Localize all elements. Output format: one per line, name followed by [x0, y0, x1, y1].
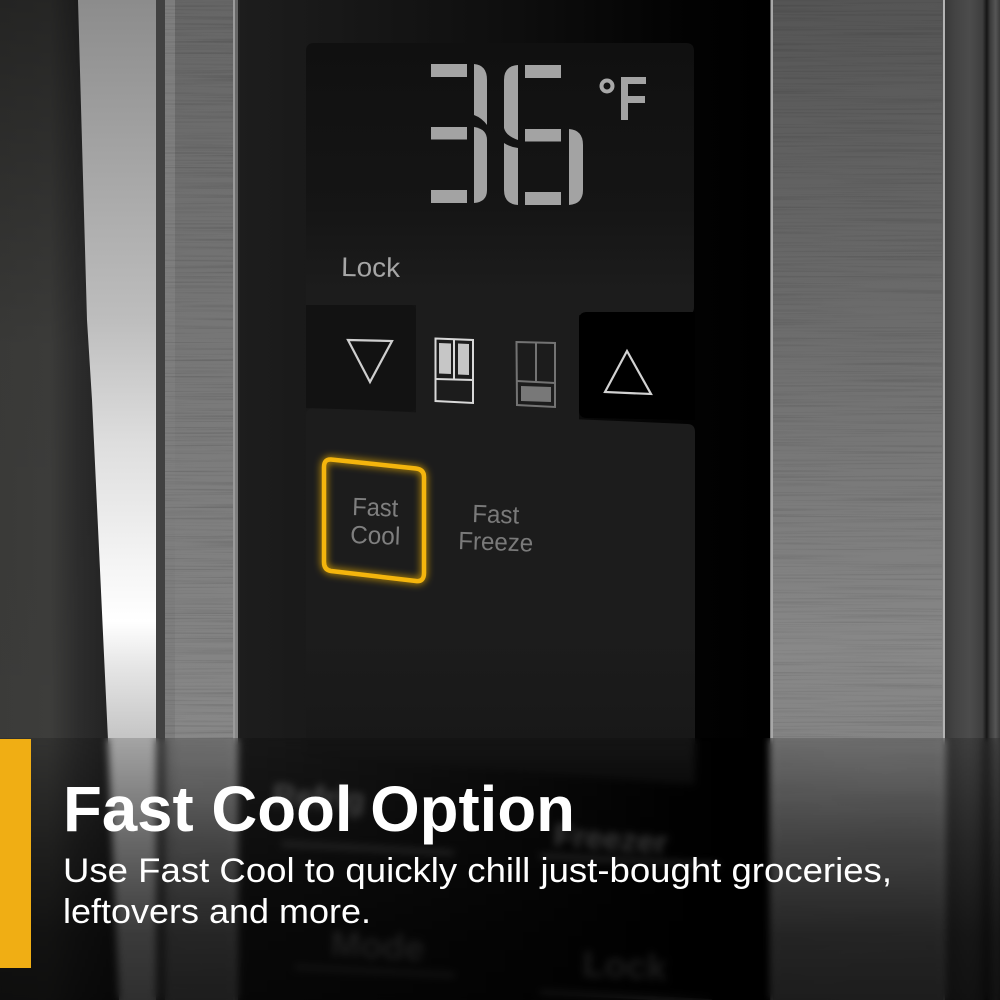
- button: temperature up: [579, 312, 695, 420]
- icon: fridge compartment selected: [436, 338, 473, 403]
- degrees Fahrenheit unit: [602, 77, 646, 120]
- yellow accent bar: [0, 739, 31, 968]
- fast freeze label: Fast: [472, 500, 520, 530]
- temperature readout 36: [431, 64, 583, 205]
- fast cool label: [350, 493, 401, 551]
- right steel trim: [770, 0, 1000, 1000]
- icon: down arrow: [348, 340, 392, 382]
- button: temperature down: [306, 305, 416, 411]
- lower panel labels behind caption: [272, 777, 720, 1000]
- lower panel labels behind caption: Refrig: [272, 777, 366, 818]
- highlight around Fast Cool: [324, 459, 424, 581]
- panel: feature buttons: [306, 408, 695, 785]
- caption backdrop band: [0, 738, 1000, 1000]
- lock label: Lock: [341, 252, 401, 283]
- panel: temperature display: [306, 43, 694, 408]
- caption body line 2: leftovers and more.: [63, 893, 371, 931]
- lower panel labels behind caption: Freezer: [553, 817, 669, 861]
- lower panel labels behind caption: Mode: [330, 923, 426, 969]
- lower panel labels behind caption: Lock: [582, 943, 669, 988]
- icon: freezer compartment: [516, 342, 555, 407]
- fast freeze label: Freeze: [458, 527, 534, 558]
- caption heading: Fast Cool Option: [63, 773, 575, 845]
- bright reflection strip: [78, 0, 156, 1000]
- black glass control panel: [240, 0, 770, 1000]
- left steel trim: [156, 0, 240, 1000]
- icon: up arrow: [605, 351, 651, 394]
- fast freeze label: [458, 500, 534, 558]
- caption body line 1: Use Fast Cool to quickly chill just-bought groceries,: [63, 852, 892, 890]
- strip between arrow buttons: [416, 305, 579, 420]
- dark fabric at left: [0, 0, 125, 1000]
- digit 3: [431, 64, 487, 203]
- fast cool label: Cool: [350, 521, 401, 551]
- fast cool label: Fast: [352, 493, 399, 523]
- digit 6: [504, 65, 583, 205]
